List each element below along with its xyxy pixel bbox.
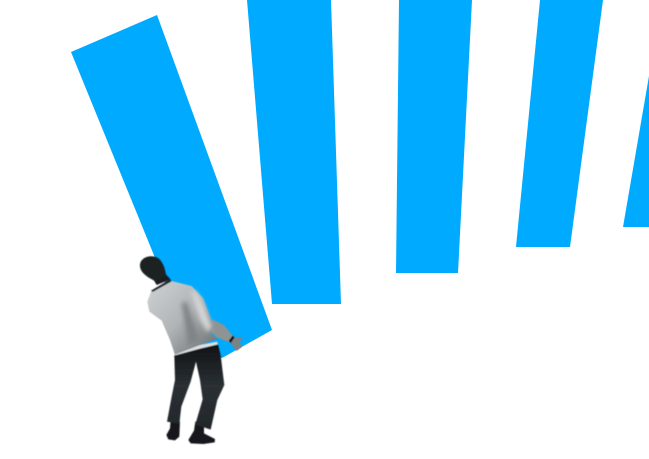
bar 5: cropped at right edge: [623, 76, 649, 227]
bar 2: [247, 0, 341, 304]
bar 1: tilted, leaning on person: [71, 15, 272, 358]
neck: [153, 273, 171, 285]
figure: man seen from behind holding the bar: [140, 256, 243, 444]
watch: [229, 336, 236, 344]
forearm: [211, 319, 233, 343]
trousers: [167, 342, 224, 430]
bar 3: [396, 0, 472, 273]
shirt hem: [173, 342, 218, 355]
left shoe: [166, 420, 180, 440]
hand: [231, 337, 243, 351]
bar 4: [516, 0, 603, 247]
head: [140, 256, 166, 282]
jacket back shadow: [182, 302, 199, 345]
collar: [151, 279, 172, 292]
right shoe: [188, 422, 215, 444]
jacket: [147, 281, 217, 355]
jacket sleeve highlight: [191, 290, 212, 332]
